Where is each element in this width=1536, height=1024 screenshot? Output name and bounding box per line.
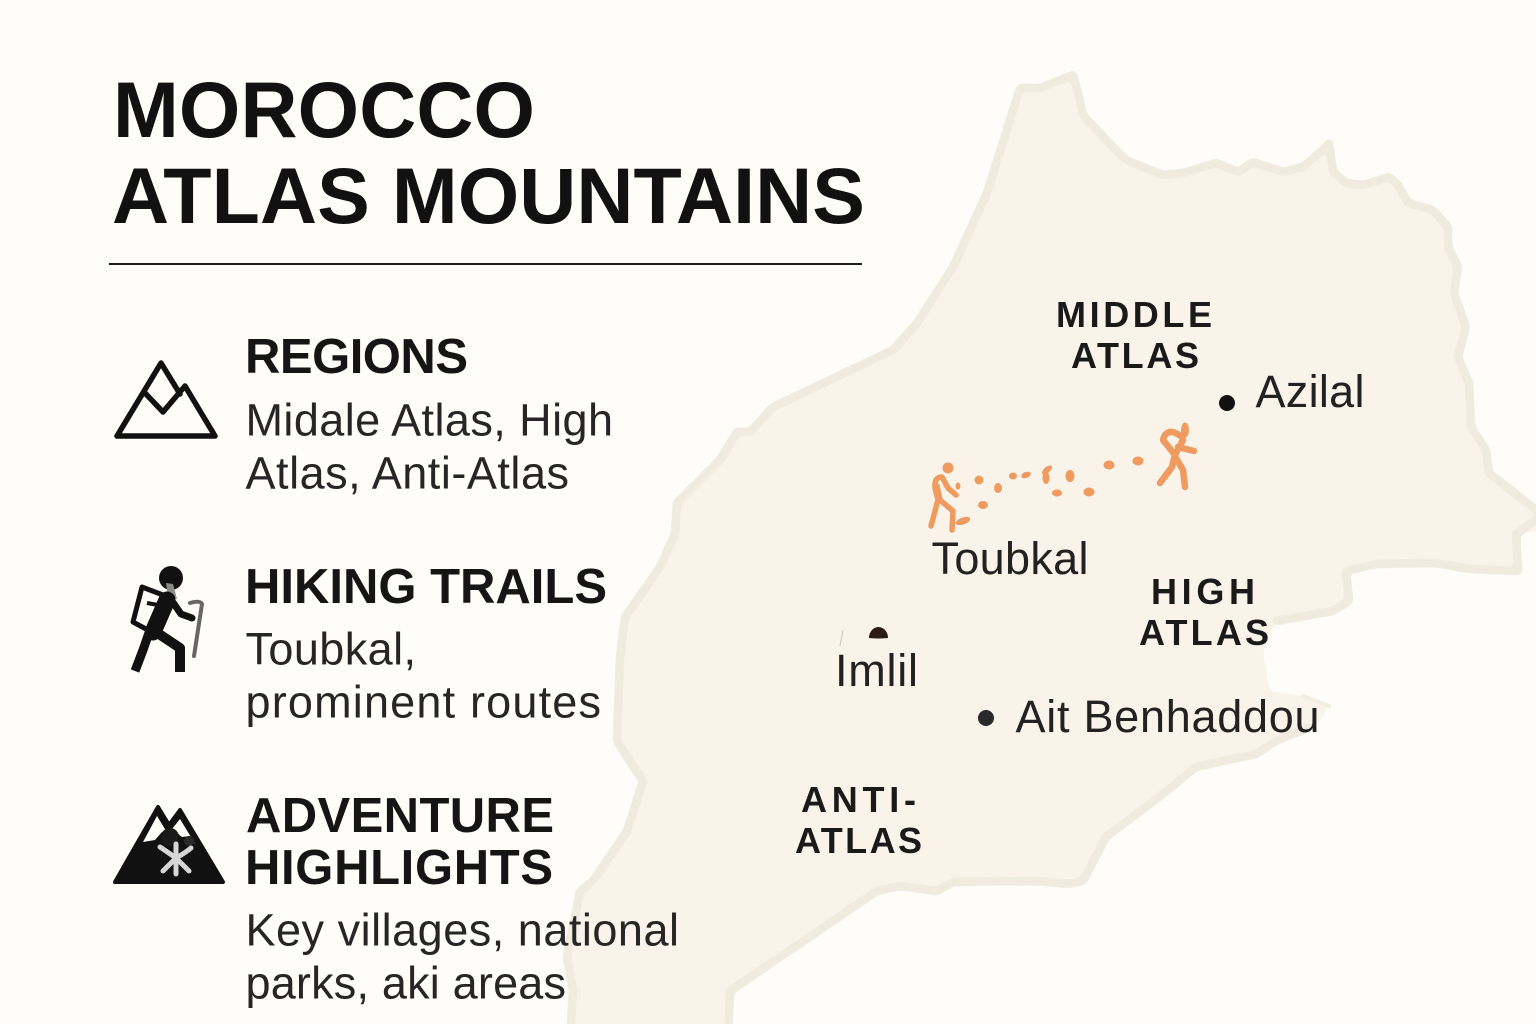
icon: left orange hiker [931, 462, 956, 530]
icon: snowy mountain with snowflake [115, 807, 223, 882]
title [112, 65, 865, 240]
title underline [109, 263, 862, 265]
region label: middle atlas [1056, 294, 1212, 376]
trail: orange hikers and footsteps [931, 422, 1194, 530]
heading: adventure highlights [245, 789, 554, 895]
text: hiking trails description [246, 624, 601, 728]
heading: adventure highlights: ADVENTURE [246, 789, 554, 843]
icon: right orange hiker [1160, 422, 1194, 487]
map: Morocco landmass [567, 75, 1536, 1024]
footsteps along the trail [955, 456, 1144, 527]
region label: anti-atlas: ATLAS [795, 820, 922, 861]
region label: middle atlas: MIDDLE [1056, 294, 1212, 335]
region label: high atlas: ATLAS [1139, 612, 1269, 653]
marker and label: Imlil: Imlil [835, 645, 918, 696]
region label: middle atlas: ATLAS [1071, 335, 1199, 376]
text: adventure highlights description [246, 904, 679, 1008]
heading: adventure highlights: HIGHLIGHTS [245, 841, 553, 895]
label: Toubkal: Toubkal [932, 533, 1088, 584]
region label: anti-atlas [795, 779, 922, 861]
marker and label: Ait Benhaddou: Ait Benhaddou [1016, 691, 1320, 742]
text: regions description: Atlas, Anti-Atlas [246, 448, 569, 498]
region label: anti-atlas: ANTI- [801, 779, 916, 820]
region label: high atlas: HIGH [1151, 571, 1255, 612]
heading: regions: REGIONS [245, 330, 468, 384]
region label: high atlas [1139, 571, 1269, 653]
icon: mountain outline [117, 363, 215, 436]
text: hiking trails description: Toubkal, [246, 624, 416, 674]
text: hiking trails description: prominent routes [246, 676, 601, 728]
icon: hiker with backpack and pole [133, 566, 202, 672]
text: regions description [246, 394, 613, 498]
text: adventure highlights description: parks, aki areas [246, 958, 566, 1008]
text: regions description: Midale Atlas, High [246, 394, 613, 446]
heading: hiking trails: HIKING TRAILS [245, 560, 607, 614]
title: ATLAS MOUNTAINS [112, 151, 865, 240]
text: adventure highlights description: Key villages, national [246, 904, 679, 956]
title: MOROCCO [113, 65, 535, 154]
marker and label: Azilal: Azilal [1256, 366, 1364, 417]
